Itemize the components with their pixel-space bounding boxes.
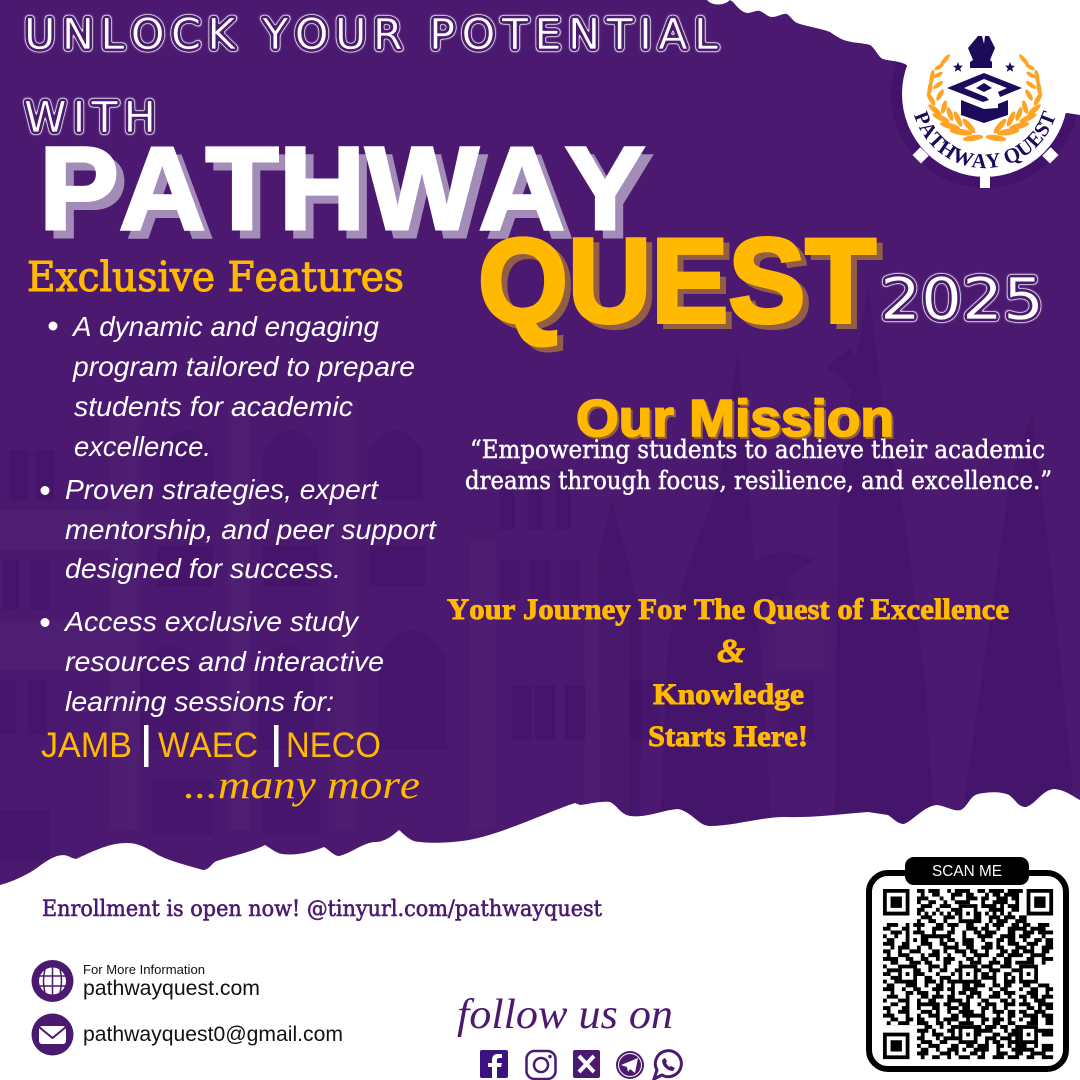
bullet list: features: Proven strategies, expert [65,474,379,505]
torn white top corner [707,0,1080,120]
QR finder and alignment patterns [883,889,1053,1059]
title: PATHWAY: PATHWAY [47,131,653,263]
icon: mail [32,1014,74,1056]
script heading: follow us on: follow us on [457,992,673,1038]
exam names: WAEC [158,726,258,765]
bullet list: features: program tailored to prepare [72,351,415,382]
contact: website [83,962,260,1000]
enrollment line: Enrollment is open now! @tinyurl.com/pathwayquest [42,897,602,922]
QR code card [869,857,1066,1069]
bullet list: features: students for academic [74,391,353,422]
logo wordmark: PATHWAY QUEST [914,110,1056,168]
bullet list: features: resources and interactive [65,646,384,677]
icon: facebook [480,1050,508,1078]
mission statement [465,435,1052,495]
icon: globe [32,960,74,1002]
bullet list: features [40,311,437,717]
icon: X [573,1050,600,1078]
icon: telegram [616,1051,644,1079]
scan me label: SCAN ME [932,863,1002,880]
title: PATHWAY: PATHWAY [39,123,645,255]
exam names [41,725,381,767]
contact: email: pathwayquest0@gmail.com [83,1023,343,1046]
heading: exclusive features: Exclusive Features [27,253,404,301]
title: QUEST: QUEST [484,219,882,353]
faded building photograph [0,285,1072,860]
title: QUEST: QUEST [478,214,876,348]
year 2025: 2025 [880,265,1044,333]
heading line: unlock your potential: UNLOCK YOUR POTENTIAL [24,10,718,60]
call to action: journey: Knowledge [653,678,804,711]
contact: website: pathwayquest.com [83,977,260,1000]
call to action: journey: & [717,633,746,670]
darker logo ring [891,0,1079,188]
torn white footer panel [0,789,1080,1080]
exam names: JAMB [41,726,132,765]
call to action: journey [447,593,1009,753]
call to action: journey: Your Journey For The Quest of Excellence [447,593,1009,626]
bullet list: features: excellence. [74,431,211,462]
icon: instagram [526,1051,556,1079]
call to action: journey: Starts Here! [648,720,808,753]
bullet list: features: learning sessions for: [65,686,334,717]
contact: website: For More Information [83,962,205,977]
bullet list: features: Access exclusive study [63,606,360,637]
heading: our mission: Our Mission [576,390,894,448]
script note: many more: ...many more [184,762,420,807]
bullet list: features: designed for success. [65,553,341,584]
bullet list: features: mentorship, and peer support [65,514,437,545]
icon: whatsapp [654,1051,681,1079]
mission statement: “Empowering students to achieve their academic [470,435,1045,464]
logo: Pathway Quest crest [902,36,1066,188]
exam names: NECO [286,726,381,765]
bullet list: features: A dynamic and engaging [71,311,379,342]
heading: our mission: Our Mission [578,392,896,450]
heading line: with: WITH [24,93,156,143]
